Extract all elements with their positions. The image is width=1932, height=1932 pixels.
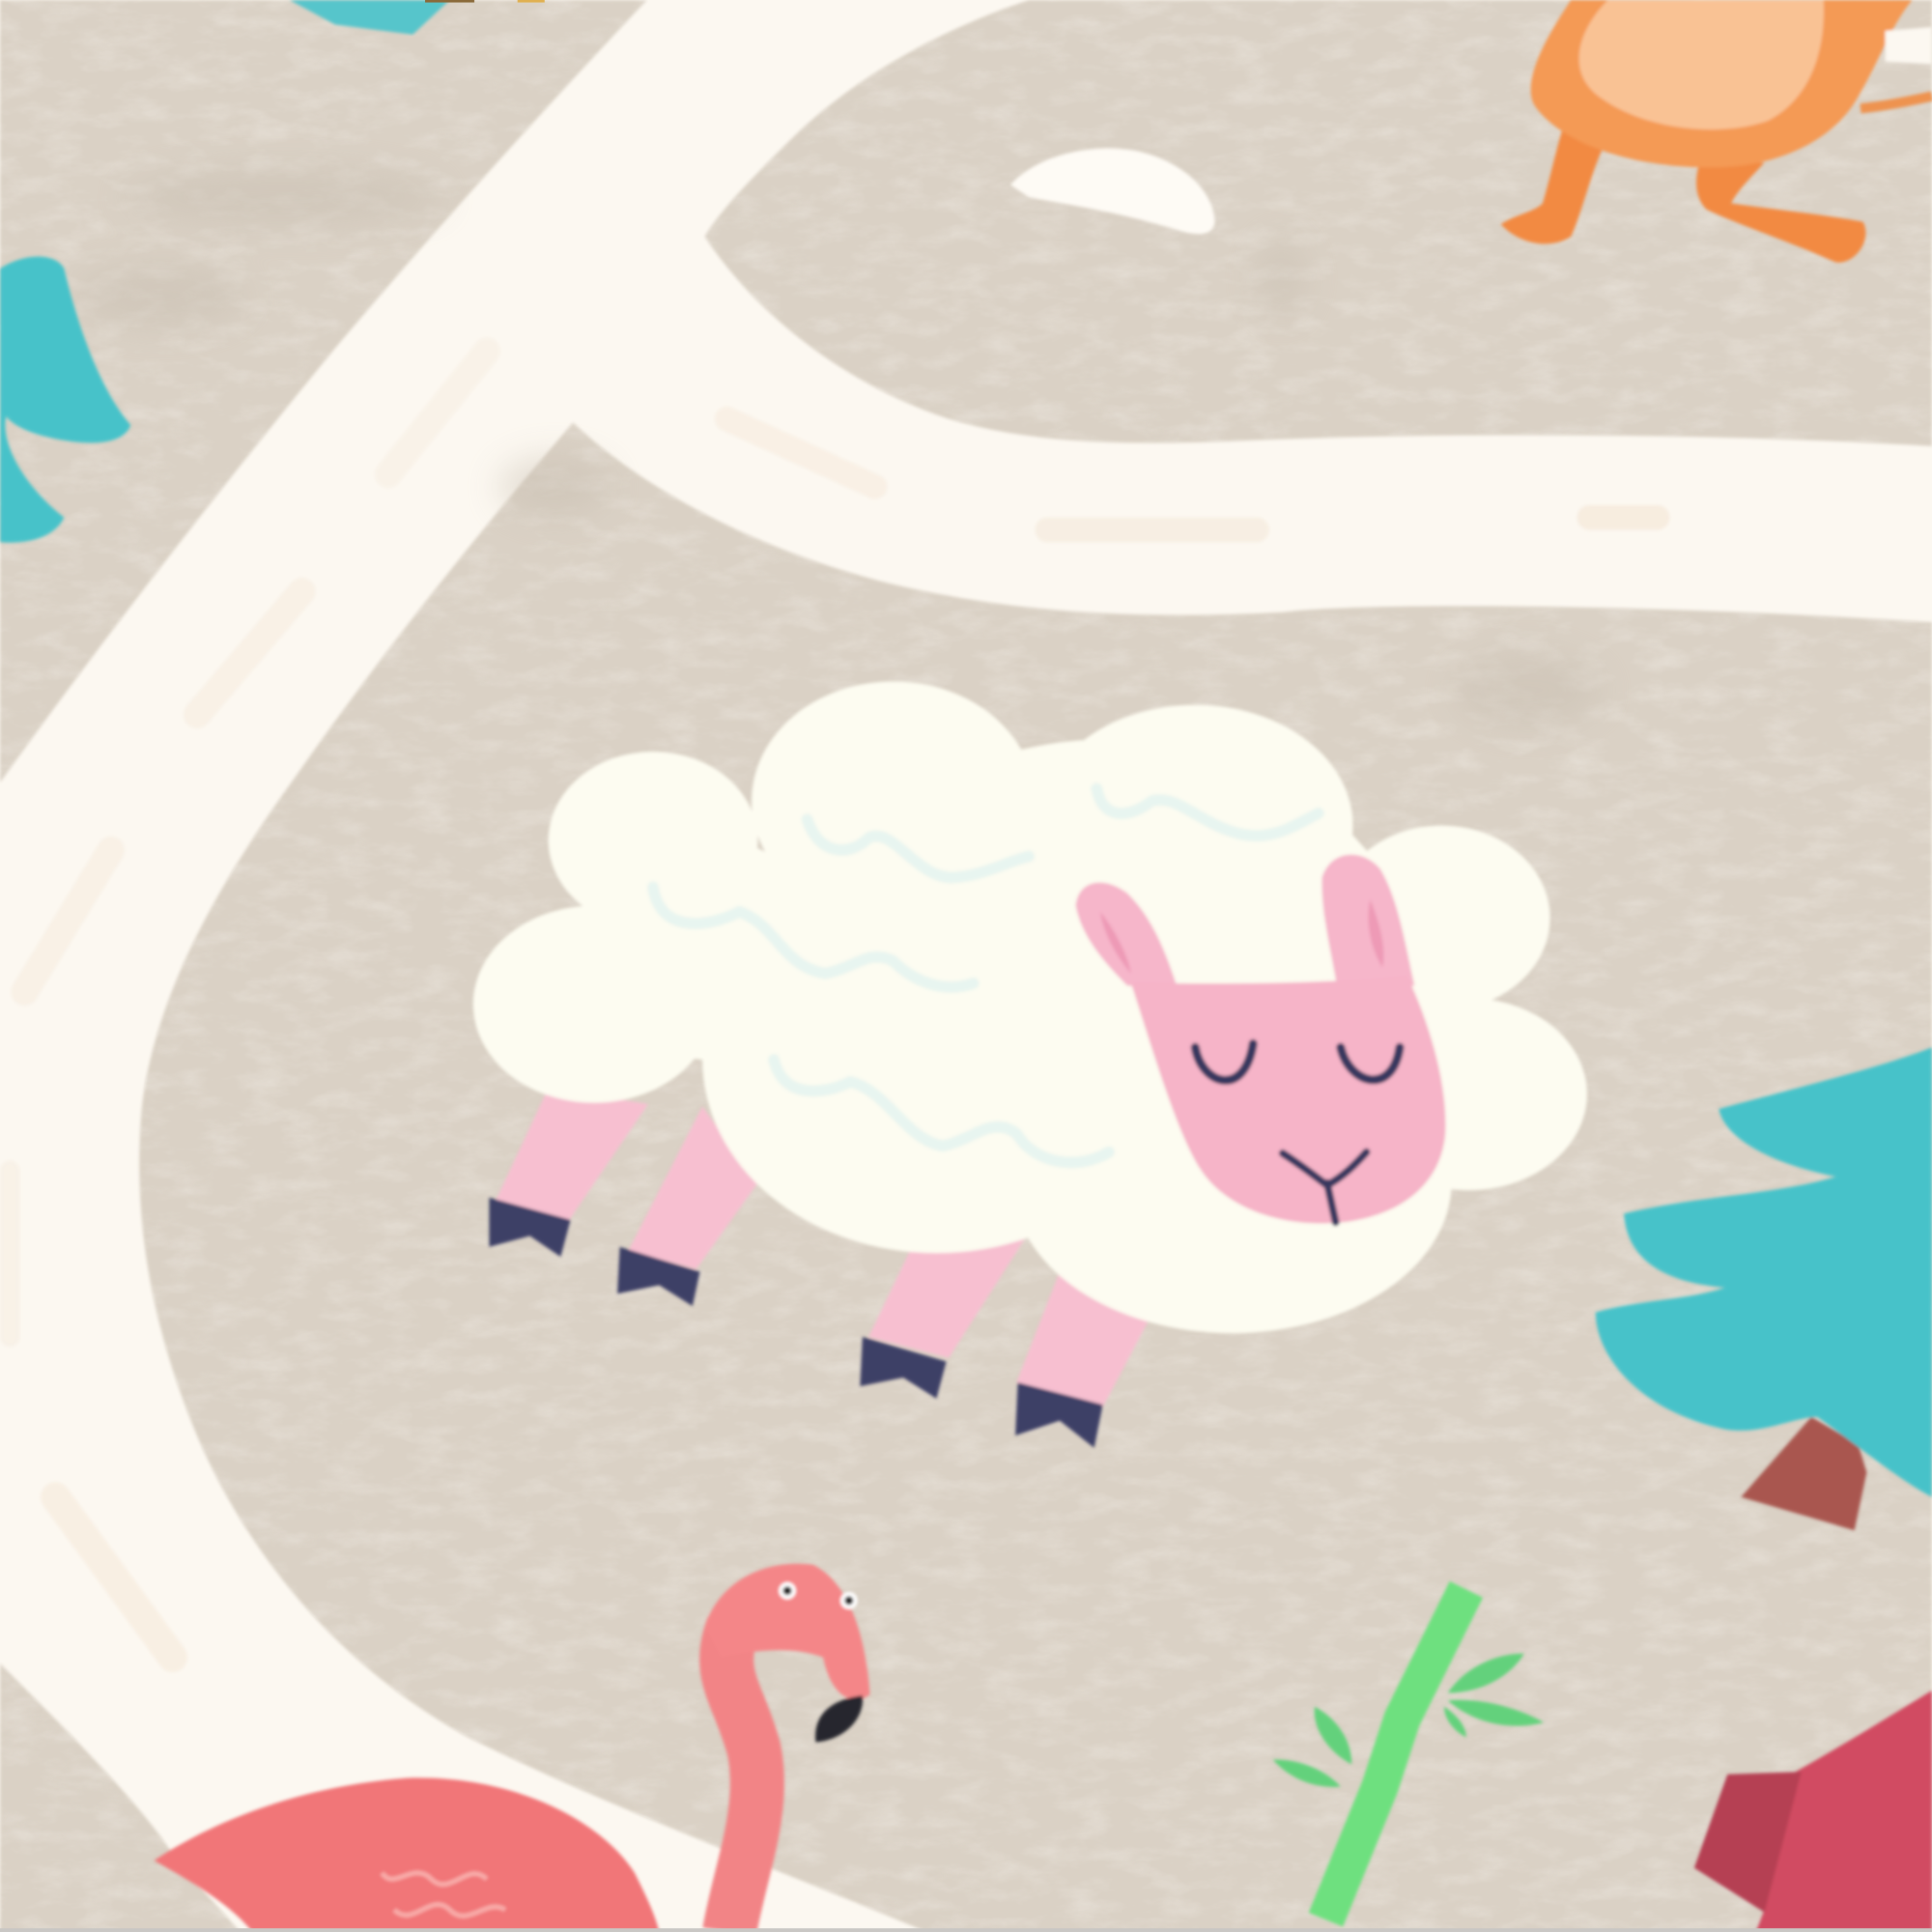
ground: central island xyxy=(139,423,1932,1932)
icon: flamingo xyxy=(154,1564,870,1932)
icon: red house xyxy=(1694,1690,1932,1932)
sheep nose and mouth xyxy=(1283,1152,1367,1222)
icon: sheep xyxy=(473,681,1587,1448)
icon: bamboo xyxy=(1273,1589,1544,1919)
icon: right tree xyxy=(1596,1047,1932,1530)
sheep face xyxy=(1131,976,1445,1223)
shadow smudges on ground xyxy=(74,167,1602,727)
icon: left cyan tree xyxy=(0,257,130,543)
orange animal tail xyxy=(1861,96,1932,108)
flamingo body xyxy=(154,1777,659,1932)
icon: cyan tip at top xyxy=(290,0,450,35)
tree foliage xyxy=(1596,1047,1932,1497)
tree trunk xyxy=(1741,1417,1866,1530)
red house main xyxy=(1756,1690,1932,1932)
sheep ears xyxy=(1076,883,1177,985)
sheep inner ears xyxy=(1100,899,1383,974)
flamingo eyes xyxy=(779,1582,858,1609)
ground: top-right island xyxy=(705,0,1932,446)
red house dark side xyxy=(1694,1772,1802,1913)
orange animal right leg xyxy=(1696,160,1865,263)
sheep legs xyxy=(496,1088,1149,1407)
bamboo leaves xyxy=(1273,1654,1544,1787)
flamingo head xyxy=(705,1564,870,1700)
orange animal belly xyxy=(1579,0,1824,129)
sheep eyes xyxy=(1195,1043,1400,1080)
icon: orange animal xyxy=(1501,0,1932,263)
orange animal left leg xyxy=(1501,129,1602,244)
ground: top-left xyxy=(0,0,647,782)
road dashes xyxy=(10,352,1658,1658)
white corner xyxy=(1886,27,1932,64)
flamingo neck xyxy=(726,1627,757,1932)
sheep hooves xyxy=(489,1198,1103,1448)
orange animal body xyxy=(1531,0,1913,168)
flamingo pupils xyxy=(783,1586,853,1605)
flamingo beak xyxy=(815,1695,863,1743)
bamboo stem xyxy=(1325,1589,1466,1919)
flamingo feathers xyxy=(382,1873,505,1916)
sheep wool waves xyxy=(653,788,1319,1162)
sheep wool xyxy=(473,681,1587,1333)
ground: bottom-left xyxy=(0,1663,241,1932)
icon: white half oval xyxy=(1010,149,1215,234)
